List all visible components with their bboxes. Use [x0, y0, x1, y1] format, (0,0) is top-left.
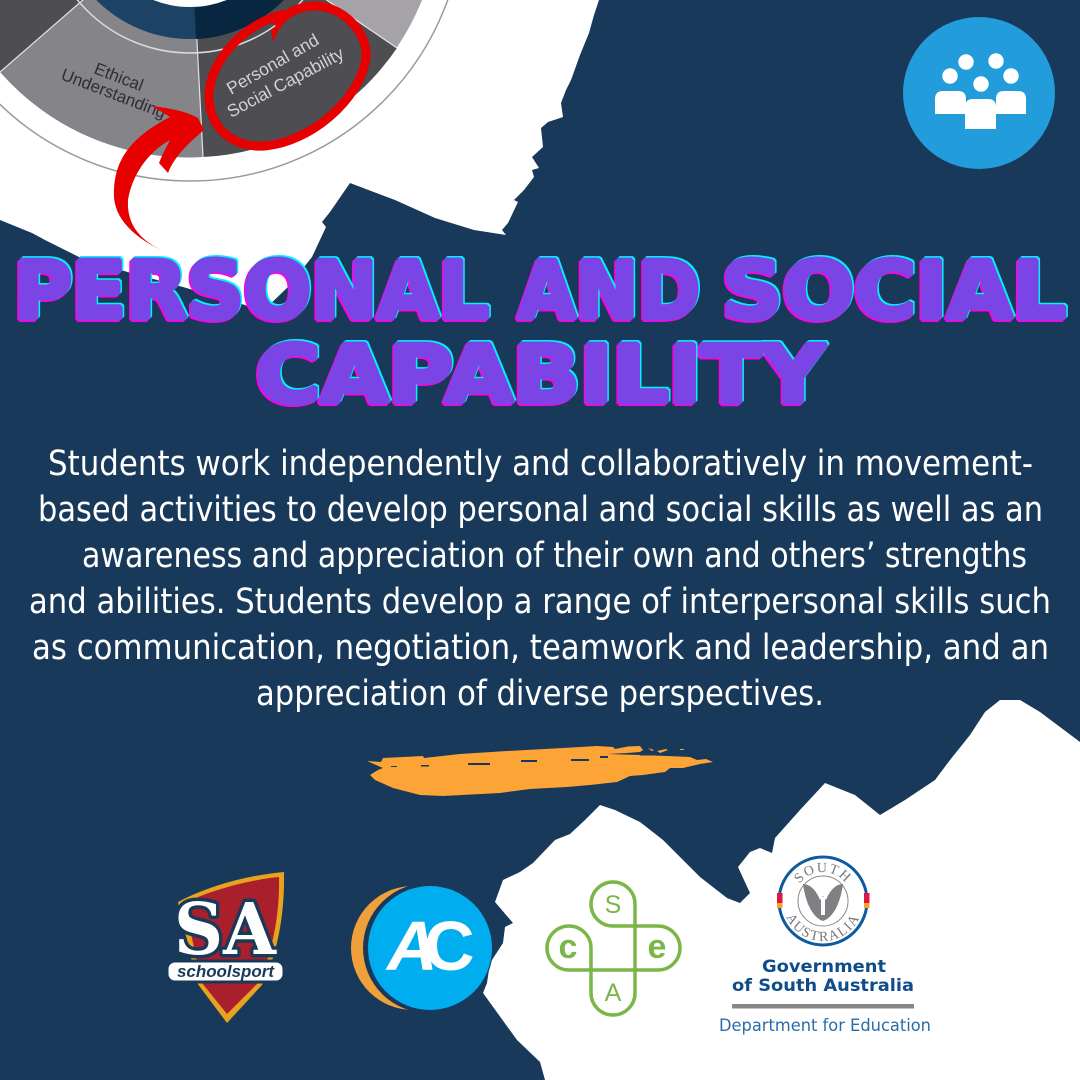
logo: Government of South Australia — [719, 856, 931, 1036]
body paragraph — [29, 444, 1051, 714]
logo: AC Australian Curriculum: C — [424, 907, 475, 985]
government wordmark — [732, 957, 914, 996]
title — [14, 245, 1066, 421]
wheel label: Personal and Social Capability: Personal and — [223, 30, 322, 98]
wheel label: Personal and Social Capability: Social Capability — [223, 43, 347, 122]
state seal — [777, 856, 870, 946]
title: CAPABILITY — [256, 329, 826, 421]
logo: SA schoolsport — [167, 872, 284, 1023]
department label: Department for Education — [719, 1016, 931, 1036]
logo: SACE: e — [648, 928, 666, 966]
wheel label: Ethical Understanding: Ethical — [92, 59, 146, 95]
curriculum wheel diagram — [0, 0, 464, 181]
logo: SACE: S — [605, 891, 621, 919]
wheel label: Ethical Understanding: Understanding — [59, 65, 169, 122]
logo: SACE: c — [559, 928, 577, 966]
government wordmark: of South Australia — [732, 976, 914, 996]
SA lettering: SA — [174, 887, 277, 971]
icon: group of people — [903, 17, 1055, 169]
torn white shape: top left — [0, 0, 599, 312]
logo: AC Australian Curriculum: A — [385, 907, 438, 985]
body paragraph: appreciation of diverse perspectives. — [256, 674, 824, 714]
state seal: AUSTRALIA — [786, 916, 860, 942]
title: SOCIAL — [722, 245, 1066, 337]
torn white shape: bottom right — [483, 700, 1080, 1080]
state seal: SOUTH — [794, 862, 852, 883]
orange brush stroke — [367, 746, 713, 796]
logo: AC Australian Curriculum — [351, 883, 493, 1013]
schoolsport pill: schoolsport — [177, 962, 275, 981]
title: AND — [518, 245, 700, 337]
title: PERSONAL — [14, 245, 489, 337]
red curved arrow — [114, 106, 204, 250]
logo: SACE — [547, 882, 680, 1015]
government wordmark: Government — [762, 957, 886, 977]
logo: SACE: A — [605, 979, 622, 1007]
red hand-drawn circle — [209, 6, 366, 146]
